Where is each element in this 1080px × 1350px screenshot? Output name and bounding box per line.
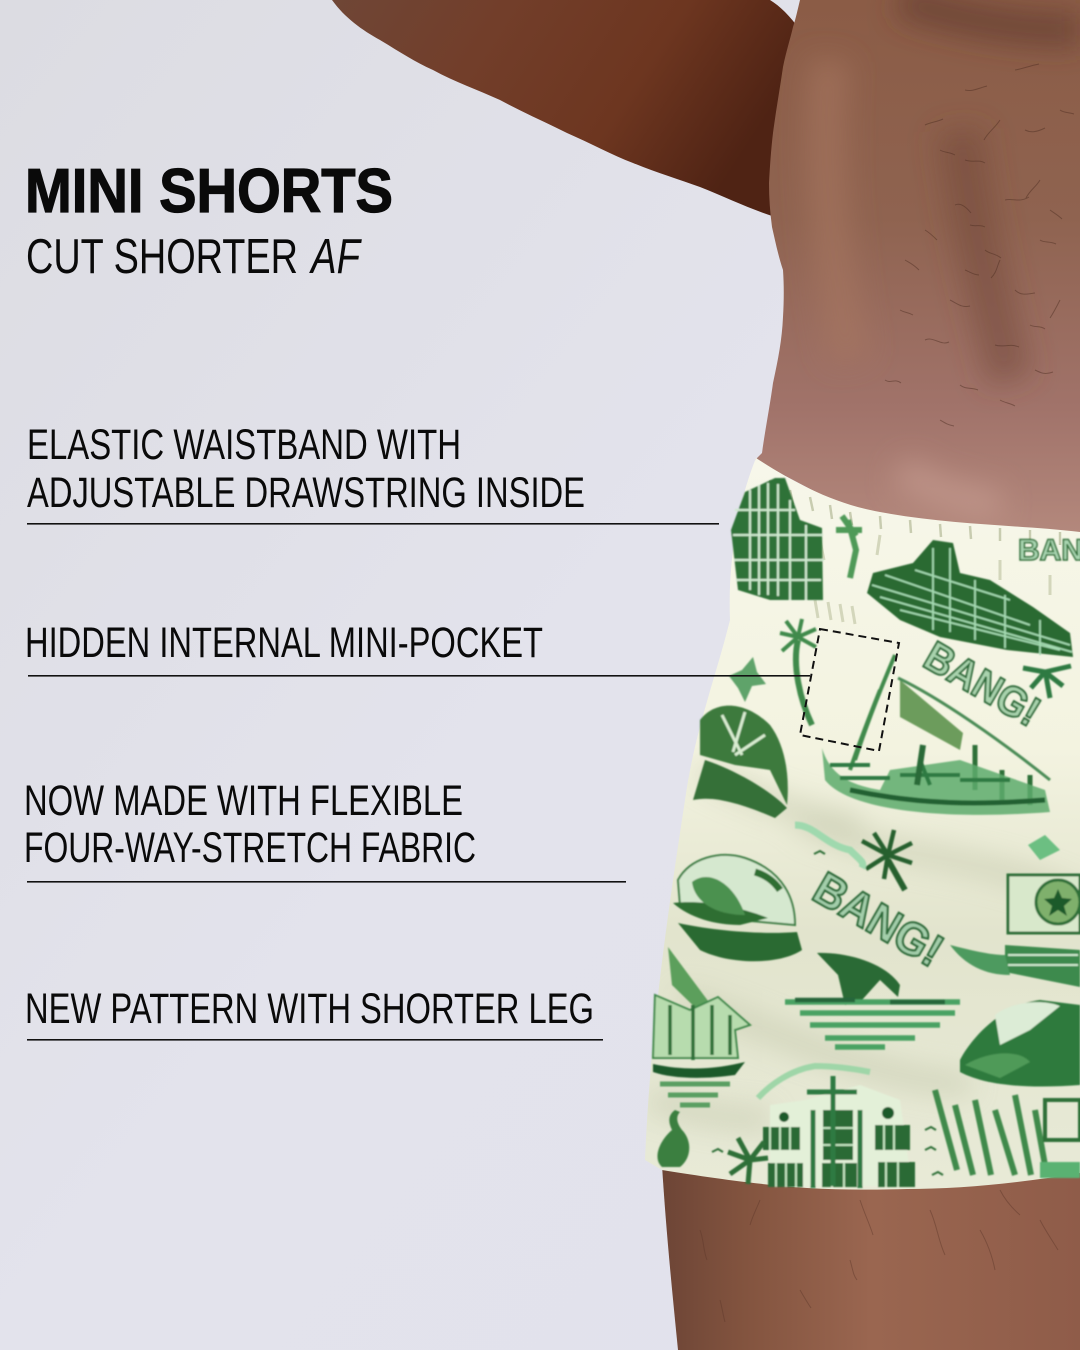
title: MINI SHORTS — [25, 157, 393, 226]
fabric print — [653, 478, 1080, 1188]
print: bird — [657, 1110, 689, 1167]
print: art deco hotel — [758, 1066, 915, 1188]
print: rock and sea — [785, 953, 960, 1047]
photo: leg hair — [700, 1190, 1058, 1322]
callout: fabric: NOW MADE WITH FLEXIBLE — [24, 777, 463, 825]
callout: pocket: HIDDEN INTERNAL MINI-POCKET — [25, 619, 543, 667]
shorts — [645, 458, 1080, 1190]
photo: body hair — [885, 64, 1074, 426]
subtitle: AF — [309, 230, 362, 284]
print: beach players — [822, 745, 1050, 815]
print: palm right — [1023, 666, 1071, 698]
pocket outline — [800, 629, 899, 751]
print: seagulls — [712, 851, 943, 1175]
callout: waistband: ELASTIC WAISTBAND WITH — [27, 421, 461, 469]
waistband gathers — [770, 480, 1060, 624]
print: palm trunk in pocket — [850, 655, 895, 770]
subtitle: CUT SHORTER — [26, 230, 298, 284]
callout: waistband: ADJUSTABLE DRAWSTRING INSIDE — [27, 469, 585, 517]
print: waistband building — [731, 478, 824, 600]
photo: thigh — [662, 1165, 1080, 1350]
callout: pattern: NEW PATTERN WITH SHORTER LEG — [25, 985, 594, 1033]
print: BANG lettering lower: BANG! — [805, 862, 952, 977]
print: crowd — [935, 1090, 1080, 1175]
print: star — [729, 657, 766, 702]
print: beach pavilion — [653, 947, 750, 1105]
print: wave right — [960, 1000, 1080, 1087]
shorts fabric — [645, 458, 1080, 1190]
print: volleyball net — [898, 678, 1050, 805]
callout: waistband — [27, 421, 719, 525]
print: lagoon scene — [693, 706, 788, 818]
fabric fold shadows — [650, 770, 1080, 1120]
photo: body shading — [826, 0, 1080, 505]
print: motor boat — [867, 540, 1073, 657]
callout: fabric — [24, 777, 626, 883]
print: star right — [1028, 835, 1060, 860]
photo: torso — [755, 0, 1080, 545]
callout: fabric: FOUR-WAY-STRETCH FABRIC — [24, 824, 476, 872]
print: palm tree — [780, 619, 816, 725]
photo: raised arm — [332, 0, 800, 216]
print: clouds — [795, 825, 863, 868]
print: BANG lettering upper: BANG! — [916, 632, 1048, 735]
print: palm tree mid — [862, 830, 912, 890]
print: wave left — [673, 855, 802, 961]
print: palm bottom — [728, 1138, 768, 1184]
print: small palm top band — [836, 516, 862, 578]
print: boat with star emblem — [950, 875, 1080, 987]
